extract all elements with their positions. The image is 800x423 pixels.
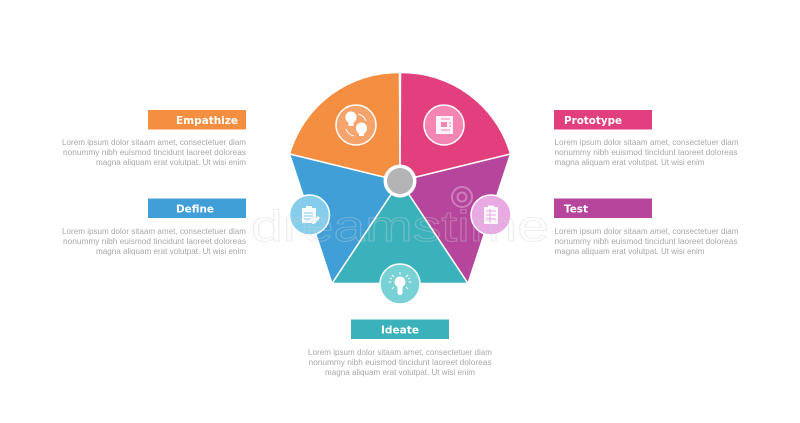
text block: define [62, 226, 246, 256]
text block: prototype: Lorem ipsum dolor sitaam amet, consectetuer diam [554, 137, 738, 147]
segment: test [400, 154, 510, 284]
heading bar: test [554, 198, 652, 218]
icon: empathize heads [336, 105, 376, 145]
heading bar: prototype: Prototype [564, 114, 622, 127]
watermark: dreamstime [251, 202, 549, 251]
text block: empathize [62, 137, 246, 167]
text block: test: Lorem ipsum dolor sitaam amet, consectetuer diam [554, 226, 738, 236]
heading bar: ideate: Ideate [381, 323, 419, 336]
heading bar: prototype [554, 110, 652, 130]
text block: empathize: nonummy nibh euismod tincidunt laoreet doloreas [63, 147, 246, 157]
text block: ideate [308, 347, 492, 377]
icon: test checklist [471, 195, 511, 235]
text block: define: nonummy nibh euismod tincidunt laoreet doloreas [63, 236, 246, 246]
center hub [384, 164, 416, 198]
text block: define: magna aliquam erat volutpat. Ut wisi enim [96, 246, 246, 256]
text block: test: magna aliquam erat volutpat. Ut wisi enim [554, 246, 704, 256]
segment: define [290, 154, 400, 284]
text block: empathize: Lorem ipsum dolor sitaam amet, consectetuer diam [62, 137, 246, 147]
panel: prototype [554, 110, 738, 167]
segment: empathize [290, 72, 400, 181]
heading bar: test: Test [564, 202, 588, 215]
text block: prototype [554, 137, 738, 167]
panel: ideate [308, 320, 492, 377]
heading bar: define: Define [176, 202, 214, 215]
text block: empathize: magna aliquam erat volutpat. Ut wisi enim [96, 157, 246, 167]
panel: define [62, 198, 246, 256]
text block: test [554, 226, 738, 256]
text block: define: Lorem ipsum dolor sitaam amet, consectetuer diam [62, 226, 246, 236]
heading bar: define [148, 198, 246, 218]
text block: ideate: magna aliquam erat volutpat. Ut wisi enim [325, 367, 475, 377]
icon: prototype blueprint [424, 105, 464, 145]
panel: test [554, 198, 738, 256]
text block: ideate: Lorem ipsum dolor sitaam amet, consectetuer diam [308, 347, 492, 357]
segment: prototype [400, 72, 510, 181]
panel: empathize [62, 110, 246, 167]
heading bar: empathize [148, 110, 246, 130]
text block: prototype: magna aliquam erat volutpat. Ut wisi enim [554, 157, 704, 167]
icon: define clipboard [290, 195, 330, 235]
heading bar: empathize: Empathize [176, 114, 238, 127]
watermark [251, 187, 549, 251]
heading bar: ideate [351, 320, 449, 339]
text block: ideate: nonummy nibh euismod tincidunt laoreet doloreas [308, 357, 492, 367]
segment: ideate [332, 181, 468, 284]
pentagon diagram [290, 72, 510, 284]
text block: prototype: nonummy nibh euismod tincidunt laoreet doloreas [554, 147, 738, 157]
text block: test: nonummy nibh euismod tincidunt laoreet doloreas [554, 236, 738, 246]
icon: ideate light bulb [380, 264, 420, 304]
